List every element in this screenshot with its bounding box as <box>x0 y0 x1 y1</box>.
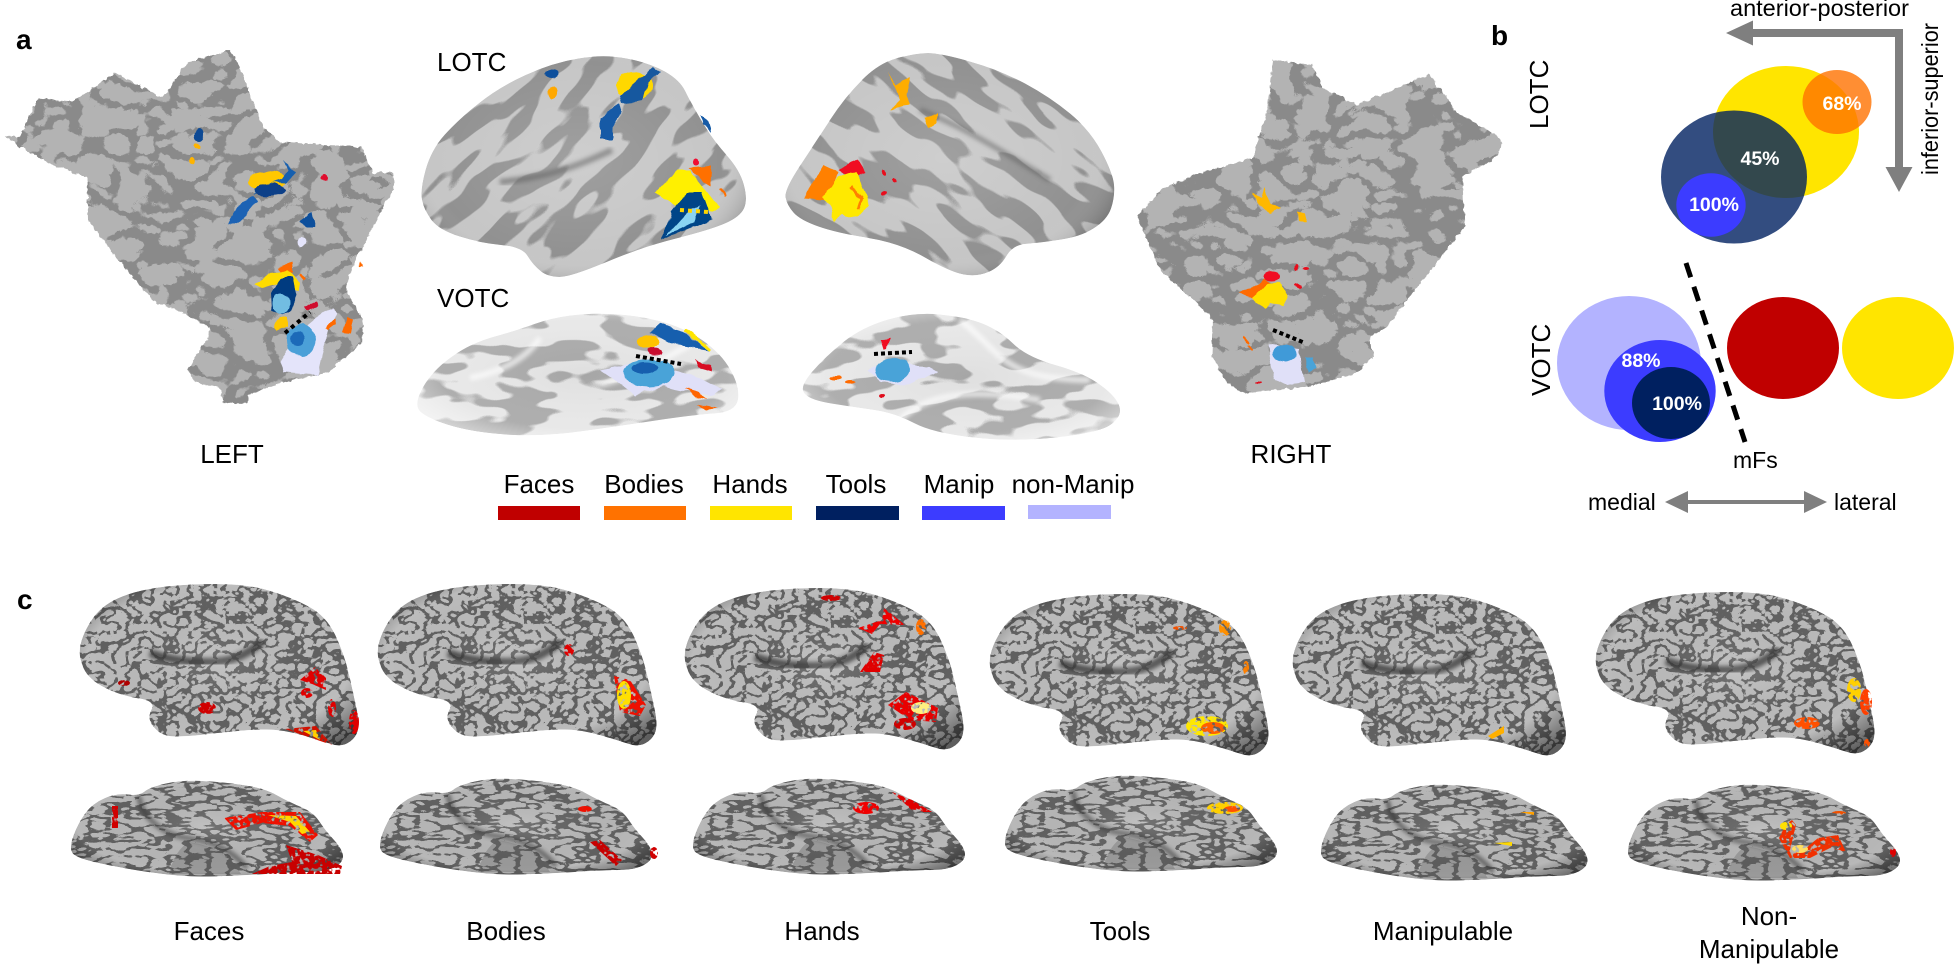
panel letter c: c <box>17 584 33 615</box>
right flat map <box>1130 50 1510 400</box>
left ventral brain <box>418 314 738 436</box>
legend item: Faces: Faces <box>504 469 574 499</box>
hand circle <box>1842 297 1954 399</box>
label LEFT: LEFT <box>200 439 264 469</box>
lateral brain Hands <box>673 577 983 767</box>
left ventral activations <box>600 323 722 410</box>
arrow anterior-posterior <box>1726 20 1903 46</box>
right flat map activations <box>1238 186 1316 385</box>
activations <box>1494 812 1534 846</box>
label Faces: Faces <box>174 916 244 946</box>
panel letter a: a <box>16 24 32 55</box>
percentages: 100% <box>1652 393 1702 415</box>
LOTC venn diagram <box>1661 66 1872 244</box>
legend item: Tools <box>816 469 899 520</box>
legend item: Hands <box>710 469 792 520</box>
right lateral brain <box>786 53 1114 276</box>
left lateral brain <box>422 56 746 277</box>
panel a <box>0 0 1510 520</box>
percentages: 100% <box>1689 194 1739 216</box>
activations <box>821 595 938 730</box>
activations <box>1794 678 1872 747</box>
activations <box>853 792 932 814</box>
arrow inferior-superior <box>1886 29 1912 192</box>
column: Hands <box>673 577 983 946</box>
legend <box>498 469 1134 520</box>
panel b <box>1491 0 1954 515</box>
right lateral activations <box>803 72 938 222</box>
panel letter b: b <box>1491 20 1508 51</box>
lateral brain Non-Manipulable <box>1584 581 1894 771</box>
legend item: Tools: Tools <box>826 469 886 499</box>
label mFs: mFs <box>1733 447 1778 473</box>
label VOTC rotated: VOTC <box>1526 324 1556 396</box>
column: Manipulable <box>1281 583 1603 946</box>
right ventral brain <box>802 314 1120 440</box>
lateral brain Manipulable <box>1281 583 1585 773</box>
ventral brain Hands <box>681 768 981 888</box>
column: Bodies <box>366 573 676 946</box>
face circle <box>1727 297 1839 399</box>
legend item: Bodies <box>604 469 686 520</box>
percentages: 88% <box>1621 350 1661 372</box>
ventral brain Bodies <box>368 768 668 888</box>
activations <box>578 806 658 866</box>
mFs dotted line right ventral <box>874 352 912 354</box>
label LOTC rotated: LOTC <box>1524 60 1554 129</box>
left flat map activations <box>190 128 363 375</box>
ventral brain Tools <box>993 765 1293 885</box>
activations <box>1488 726 1504 739</box>
activations <box>1207 802 1243 814</box>
axis label inferior-superior: inferior-superior <box>1917 23 1943 175</box>
activations <box>564 644 646 716</box>
percentages <box>1689 93 1862 216</box>
label medial: medial <box>1588 489 1656 515</box>
legend item: non-Manip <box>1012 469 1134 519</box>
label VOTC: VOTC <box>437 283 509 313</box>
activations <box>1779 811 1896 858</box>
arrow medial-lateral <box>1665 491 1827 513</box>
panel c <box>17 573 1916 964</box>
percentages: 45% <box>1740 148 1780 170</box>
activations <box>118 667 359 745</box>
legend item: Faces <box>498 469 580 520</box>
left lateral activations <box>545 68 725 240</box>
label Tools: Tools <box>1090 916 1150 946</box>
label lateral: lateral <box>1834 489 1897 515</box>
ventral brain Manipulable <box>1309 774 1603 894</box>
activations <box>112 806 342 874</box>
label Hands: Hands <box>784 916 860 946</box>
lateral brain Faces <box>68 573 378 763</box>
mFs dotted line left map <box>285 312 310 333</box>
legend item: non-Manip: non-Manip <box>1012 469 1134 499</box>
lateral brain Tools <box>978 583 1288 773</box>
legend item: Bodies: Bodies <box>604 469 684 499</box>
column: Faces <box>59 573 378 946</box>
percentages <box>1621 350 1702 415</box>
mFs dotted line left ventral <box>636 356 681 364</box>
tfs dotted line <box>680 210 708 212</box>
legend item: Hands: Hands <box>712 469 788 499</box>
ventral brain Faces <box>59 770 359 890</box>
label RIGHT: RIGHT <box>1251 439 1332 469</box>
label Non-Manipulable: Manipulable <box>1699 934 1839 964</box>
label Manipulable: Manipulable <box>1373 916 1513 946</box>
activations <box>1173 620 1249 736</box>
label Bodies: Bodies <box>466 916 546 946</box>
column: Tools <box>978 583 1293 946</box>
mFs dotted line right map <box>1273 330 1305 343</box>
mFs dashed line <box>1686 263 1745 442</box>
left flat map <box>0 45 400 407</box>
percentages: 68% <box>1822 93 1862 115</box>
right ventral activations <box>830 339 938 396</box>
legend item: Manip <box>922 469 1005 520</box>
VOTC venn diagram <box>1557 296 1716 442</box>
label LOTC: LOTC <box>437 47 506 77</box>
legend item: Manip: Manip <box>924 469 994 499</box>
label Non-Manipulable: Non- <box>1741 901 1797 931</box>
ventral brain Non-Manipulable <box>1616 774 1916 894</box>
column: Non-Manipulable <box>1584 581 1916 964</box>
lateral brain Bodies <box>366 573 676 763</box>
